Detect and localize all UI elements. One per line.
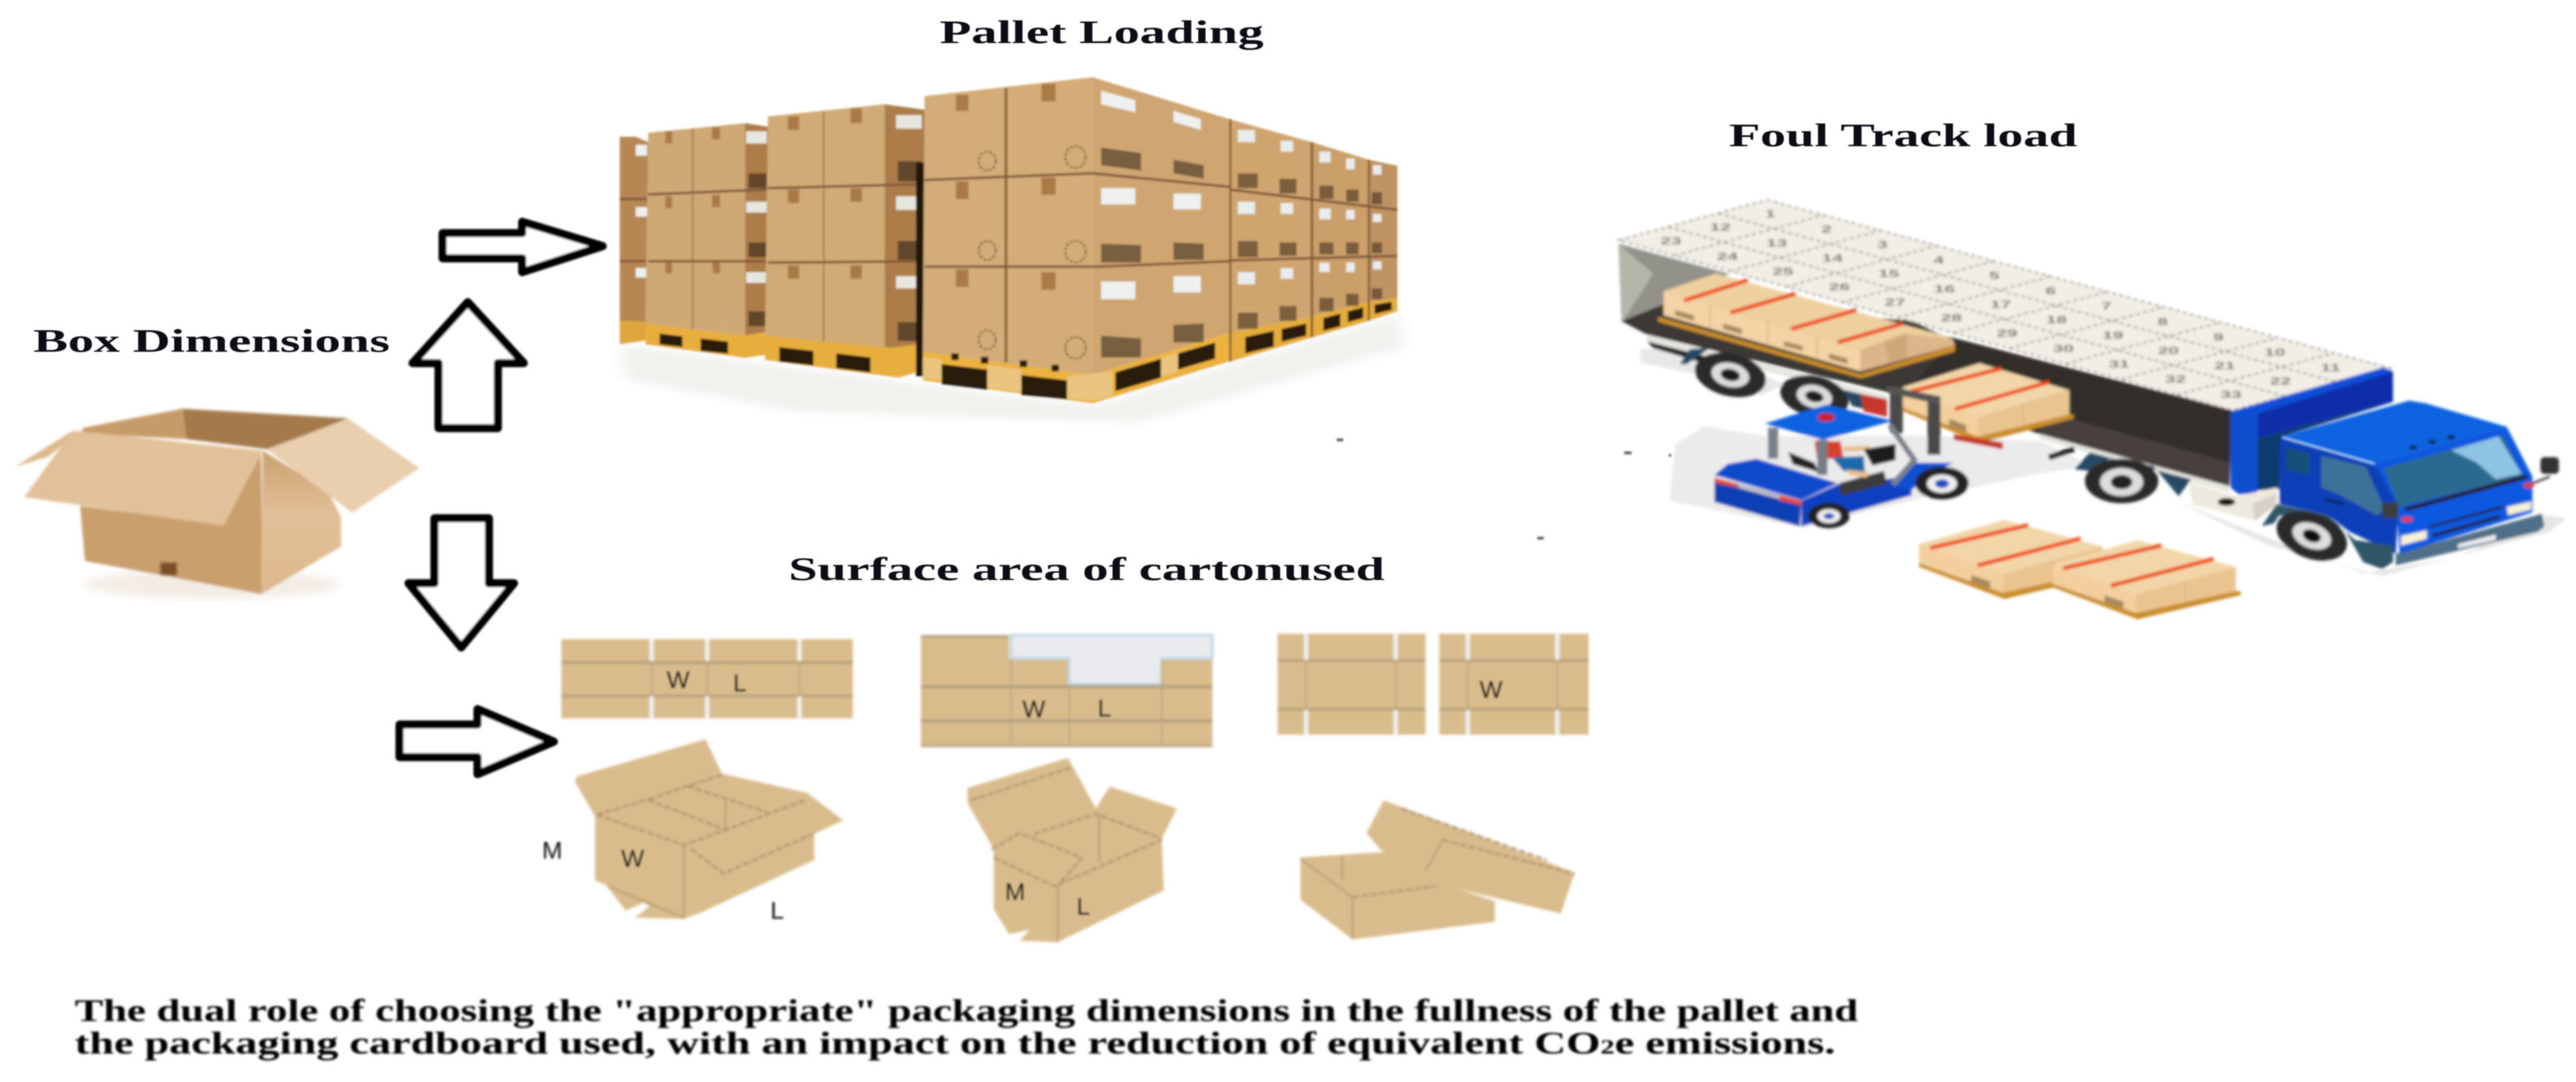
dimension labels on cartons: W: [667, 667, 690, 694]
flat carton layout 2: [921, 635, 1212, 747]
dimension labels on cartons: W: [621, 846, 645, 872]
trailer roof with numbered cells: 8: [2158, 316, 2168, 327]
trailer roof with numbered cells: 28: [1941, 312, 1962, 323]
trailer roof with numbered cells: 32: [2165, 374, 2186, 385]
heading: Foul Track load: Foul Track load: [1729, 117, 2077, 154]
trailer roof with numbered cells: 18: [2046, 314, 2067, 325]
box right flap: [266, 419, 419, 513]
forklift canopy: [1766, 405, 1914, 484]
trailer roof with numbered cells: 26: [1829, 281, 1850, 292]
trailer roof with numbered cells: 31: [2108, 358, 2129, 370]
trailer roof with numbered cells: 13: [1766, 237, 1787, 249]
trailer roof with numbered cells: 1: [1765, 208, 1775, 219]
trailer roof with numbered cells: 20: [2158, 345, 2179, 357]
dimension labels on cartons: L: [1077, 894, 1090, 920]
forklift driver and seat: [1788, 441, 1895, 478]
trailer roof with numbered cells: 29: [1996, 327, 2017, 339]
ground shadow: forklift: [1640, 347, 2093, 528]
dimension labels on cartons: M: [542, 837, 562, 864]
arrow: down: [408, 518, 514, 647]
trailer roof with numbered cells: 23: [1661, 235, 1682, 246]
trailer roof with numbered cells: [1619, 200, 2391, 410]
box front flap: [24, 431, 263, 526]
dimension labels on cartons: L: [771, 898, 784, 924]
trailer roof with numbered cells: 17: [1990, 299, 2012, 310]
trailer roof with numbered cells: 30: [2053, 343, 2074, 354]
rear trailer wheels: [1679, 346, 1887, 424]
trailer roof with numbered cells: 15: [1878, 268, 1900, 279]
trailer roof with numbered cells: 5: [1989, 270, 1999, 281]
assembled carton 3 with lid: [1300, 800, 1575, 939]
forklift: [1714, 386, 2003, 528]
flat carton layout 1: [561, 639, 853, 718]
dimension labels on cartons: L: [1098, 695, 1111, 722]
cab wheel and wheel arch: [2262, 502, 2393, 570]
dimension labels on cartons: M: [1005, 879, 1025, 906]
trailer roof with numbered cells: 24: [1717, 251, 1739, 262]
image: truck, trailer and forklift loading pallets: [1619, 200, 2566, 619]
trailer roof with numbered cells: 4: [1934, 254, 1944, 266]
trailer roof with numbered cells: 6: [2046, 285, 2056, 296]
assembled carton 1: [575, 739, 843, 919]
pallet stack: second: [646, 123, 768, 358]
arrow: right to carton layouts: [400, 709, 554, 774]
pallet stack: third: [765, 104, 924, 378]
arrow: right to pallet loading: [443, 222, 603, 272]
dimension labels on cartons: W: [1022, 696, 1046, 723]
trailer roof with numbered cells: 14: [1822, 253, 1843, 264]
trailer front panel: [2231, 367, 2393, 495]
trailer roof with numbered cells: 21: [2215, 360, 2236, 371]
caption: The dual role of choosing the "appropriate" packaging dimensions in the fullness of the pallet and: [75, 993, 1858, 1028]
ground shadow: cab: [2176, 501, 2566, 576]
cab body: [2280, 400, 2559, 565]
trailer roof with numbered cells: 7: [2101, 301, 2111, 312]
forklift wheels: [1808, 467, 1969, 528]
trailer roof with numbered cells: 19: [2103, 330, 2124, 340]
trailer roof with numbered cells: 11: [2320, 362, 2340, 374]
trailer roof with numbered cells: 27: [1884, 296, 1905, 308]
box front panel: [80, 451, 263, 595]
trailer roof with numbered cells: 9: [2213, 331, 2224, 343]
flat carton layouts: [561, 634, 1588, 747]
image: carton layouts and assembled cartons: [561, 634, 1588, 942]
heading: Surface area of carton used: Surface area of cartonused: [789, 551, 1385, 587]
forklift body: [1714, 459, 1954, 526]
caption: [75, 993, 1858, 1061]
heading: Pallet Loading: Pallet Loading: [940, 14, 1264, 50]
box side panel: [261, 451, 341, 595]
trailer roof with numbered cells: 16: [1934, 283, 1955, 295]
trailer roof with numbered cells: 33: [2220, 389, 2241, 400]
pallet stack: right receding rows: [1230, 119, 1398, 362]
assembled carton 2: [967, 758, 1177, 942]
trailer roof with numbered cells: 10: [2264, 347, 2285, 358]
box notch: [160, 562, 177, 575]
cargo on trailer: [1658, 274, 1955, 379]
pallet stack: front corner: [923, 77, 1230, 404]
caption: the packaging cardboard used, with an impact on the reduction of equivalent CO 2e emissions.: [75, 1026, 1835, 1061]
trailer interior, side wall and drive wheel: [1619, 244, 2232, 504]
dimension labels on cartons: W: [1480, 677, 1503, 703]
trailer roof with numbered cells: 2: [1822, 223, 1832, 235]
dimension labels on cartons: [542, 667, 1503, 924]
pallet stack: far left: [620, 136, 648, 344]
forklift mast and forks: [1887, 386, 2003, 455]
trailer blue front panel and truck cab: [2189, 367, 2559, 570]
assembled cartons 2 and 3: [967, 758, 1575, 942]
heading: Box Dimensions: Box Dimensions: [33, 322, 390, 359]
trailer roof with numbered cells: 3: [1877, 239, 1887, 250]
trailer roof with numbered cells: 12: [1709, 222, 1731, 233]
flat carton layout 4: [1439, 634, 1588, 734]
trailer roof with numbered cells: 22: [2270, 375, 2291, 387]
image: open cardboard box: [15, 409, 419, 599]
chassis: [2189, 482, 2280, 521]
cargo pallet on forks: [1901, 363, 2073, 443]
dimension labels on cartons: L: [733, 670, 746, 697]
arrow: up: [413, 302, 524, 428]
flat carton layout 3: [1277, 634, 1425, 734]
trailer roof with numbered cells: 25: [1773, 266, 1794, 277]
cargo pallets on ground: [1919, 520, 2241, 619]
stray marks: [1337, 439, 1671, 539]
